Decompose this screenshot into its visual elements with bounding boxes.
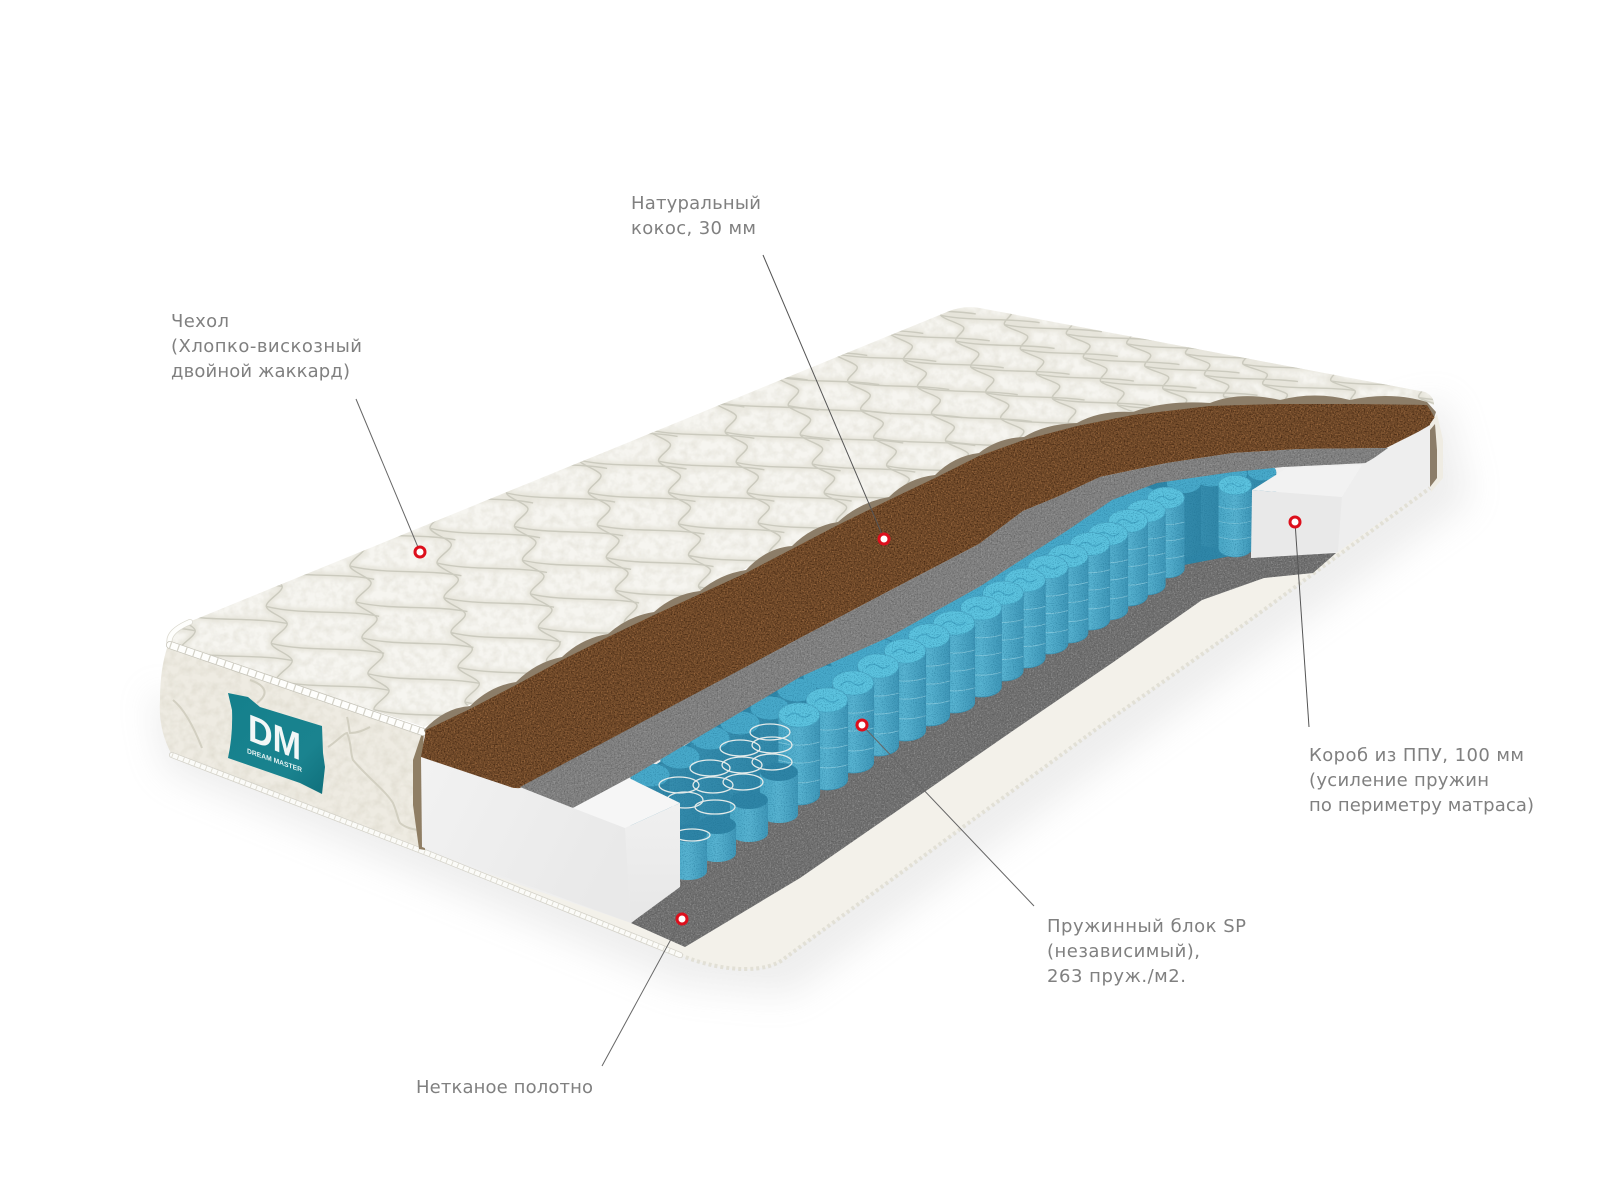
coconut layer [421, 404, 1437, 788]
leader line: spring block [862, 725, 1034, 906]
top quilted cover [172, 307, 1434, 727]
marker: spring block [857, 720, 867, 730]
lower felt layer [631, 500, 1336, 947]
label: non-woven fabric: Нетканое полотно [416, 1077, 593, 1098]
front foam block [421, 757, 680, 923]
label: cover: (Хлопко-вискозный [171, 336, 362, 357]
upper rope piping [169, 622, 423, 732]
label: natural coconut [631, 193, 761, 239]
end side panel with quilting [160, 645, 423, 849]
tag logo DM: DM [248, 706, 301, 769]
label: natural coconut: Натуральный [631, 193, 761, 214]
label: spring block: Пружинный блок SP [1047, 916, 1246, 937]
label: spring block: 263 пруж./м2. [1047, 966, 1186, 987]
lower rope piping [172, 755, 680, 955]
label: spring block [1047, 916, 1246, 987]
label: cover [171, 311, 362, 382]
mattress illustration [156, 307, 1466, 994]
upper felt layer [520, 448, 1388, 808]
spring backing [640, 462, 1262, 865]
scalloped cover edge [424, 396, 1436, 745]
bottom cover [427, 488, 1430, 969]
brand tag [228, 693, 325, 794]
cut edge of cover on the end panel [413, 727, 425, 850]
leader line: cover [356, 399, 420, 552]
marker: foam box [1290, 517, 1300, 527]
open spring coils [659, 724, 792, 841]
far end cover strip [1430, 414, 1443, 492]
back foam block [1251, 425, 1430, 558]
back spring row [630, 464, 1276, 860]
label: PU foam box: Короб из ППУ, 100 мм [1309, 745, 1524, 766]
label: PU foam box [1309, 745, 1534, 816]
soft floor shadow [150, 400, 1470, 995]
leader line: coconut [763, 255, 884, 539]
marker: coconut [879, 534, 889, 544]
label: cover: Чехол [171, 311, 229, 332]
spring block [630, 462, 1276, 880]
tag text Dream Master: DREAM MASTER [247, 746, 303, 774]
front spring row [778, 475, 1252, 805]
leader line: non-woven fabric [602, 919, 682, 1066]
marker: non-woven fabric [677, 914, 687, 924]
label: PU foam box: по периметру матраса) [1309, 795, 1534, 816]
label: spring block: (независимый), [1047, 941, 1200, 962]
label: PU foam box: (усиление пружин [1309, 770, 1489, 791]
label: cover: двойной жаккард) [171, 361, 350, 382]
cut spring sleeves [669, 763, 798, 880]
marker: cover [415, 547, 425, 557]
label: natural coconut: кокос, 30 мм [631, 218, 756, 239]
leader line: foam box [1295, 522, 1309, 727]
